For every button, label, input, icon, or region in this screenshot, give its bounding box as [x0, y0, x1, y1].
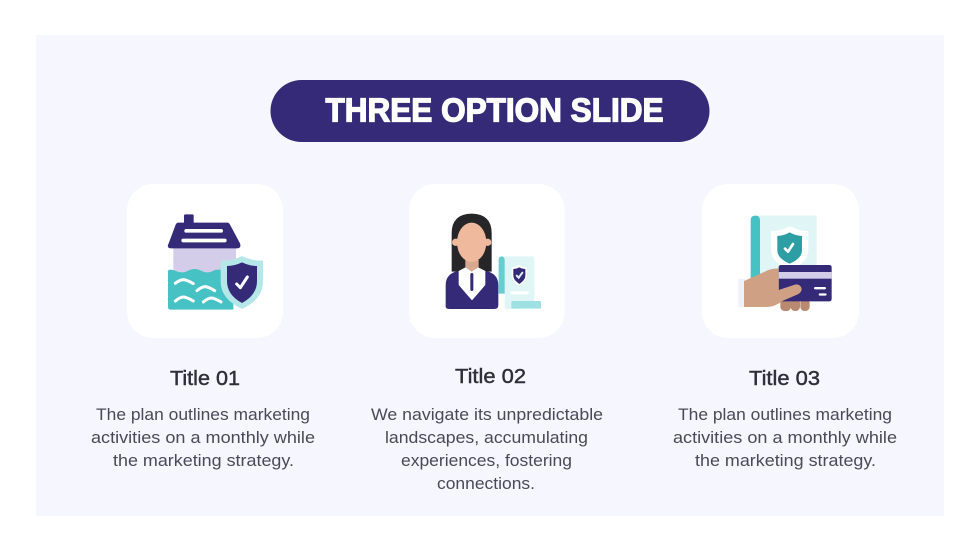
text block 3: the marketing strategy. — [695, 452, 876, 470]
icon: flooded house with shield — [168, 214, 263, 310]
icon card 1 — [127, 184, 283, 338]
text block 3: The plan outlines marketing — [678, 406, 892, 424]
panel: option 1 — [91, 184, 315, 470]
icon card 3 — [702, 184, 859, 338]
icon card 2 — [409, 184, 564, 338]
panel: option 3 — [673, 184, 897, 470]
icon: hand holding card with insurance book — [738, 216, 832, 311]
text block 1: The plan outlines marketing — [96, 406, 310, 424]
text block 2: experiences, fostering — [401, 452, 572, 470]
text block 2: We navigate its unpredictable — [371, 406, 603, 424]
text block 1: the marketing strategy. — [113, 452, 294, 470]
text block 1 — [91, 406, 315, 470]
panel: option 2 — [371, 184, 603, 493]
text block 2 — [371, 406, 603, 493]
heading: title 01: Title 01 — [170, 367, 240, 390]
heading: title 03: Title 03 — [749, 367, 820, 390]
text block 3 — [673, 406, 897, 470]
text block 3: activities on a monthly while — [673, 429, 897, 447]
icon: advisor with policy document — [446, 214, 541, 309]
text block 2: landscapes, accumulating — [385, 429, 588, 447]
title banner — [270, 80, 710, 142]
heading: title 02: Title 02 — [455, 365, 526, 388]
text block 1: activities on a monthly while — [91, 429, 315, 447]
title banner: THREE OPTION SLIDE — [326, 92, 664, 128]
text block 2: connections. — [437, 475, 535, 493]
